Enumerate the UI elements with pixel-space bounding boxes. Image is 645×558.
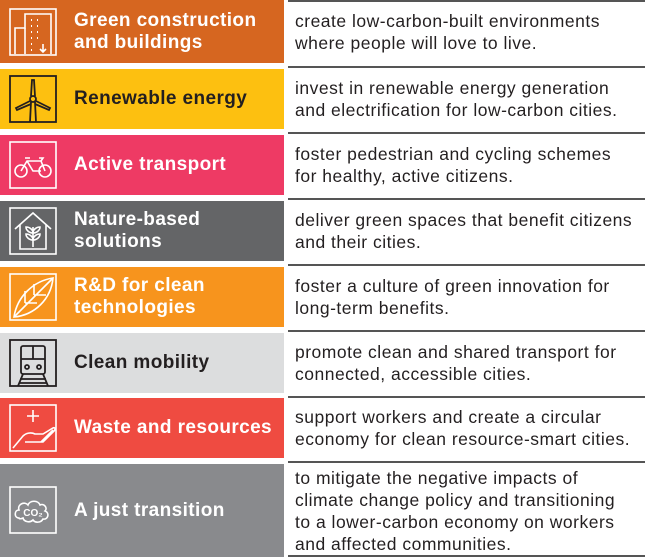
description (295, 210, 632, 252)
label (74, 10, 256, 52)
description (295, 144, 611, 186)
label: R&D for clean (74, 275, 205, 296)
icon: CO2 cloud: CO₂ (23, 508, 43, 519)
label: Nature-based (74, 209, 200, 230)
description: support workers and create a circular (295, 407, 601, 427)
description: foster a culture of green innovation for (295, 276, 610, 296)
description: long-term benefits. (295, 298, 449, 318)
label: Active transport (74, 154, 226, 175)
panel: green construction (0, 0, 284, 63)
description: foster pedestrian and cycling schemes (295, 144, 611, 164)
description: create low-carbon-built environments (295, 10, 600, 30)
icon: building (9, 8, 57, 56)
icon: CO2 cloud (9, 486, 57, 534)
label: Renewable energy (74, 88, 247, 109)
icon: bicycle (9, 141, 57, 189)
description (295, 276, 610, 318)
icon: leaf (9, 273, 57, 321)
description (295, 407, 630, 449)
row: Clean mobility (0, 333, 617, 393)
row: Green construction (0, 0, 600, 63)
panel: renewable (0, 69, 284, 129)
description: and affected communities. (295, 534, 511, 554)
row: Renewable energy (0, 69, 618, 129)
icon: hand with plus (9, 404, 57, 452)
description (295, 78, 618, 120)
description: deliver green spaces that benefit citizens (295, 210, 632, 230)
description: connected, accessible cities. (295, 364, 531, 384)
description: for healthy, active citizens. (295, 166, 513, 186)
icon: house with plant (9, 207, 57, 255)
description (295, 342, 617, 384)
description: to mitigate the negative impacts of (295, 468, 578, 488)
label: Waste and resources (74, 417, 272, 438)
row: Just transition (0, 464, 615, 557)
label: solutions (74, 231, 162, 252)
description: and their cities. (295, 232, 421, 252)
panel: nature-based (0, 201, 284, 261)
label: technologies (74, 297, 196, 318)
panel: active transport (0, 135, 284, 195)
description: to a lower-carbon economy on workers (295, 512, 615, 532)
icon: wind turbine (9, 75, 57, 123)
description: promote clean and shared transport for (295, 342, 617, 362)
row: Waste (0, 398, 630, 458)
row: Nature-based (0, 201, 632, 261)
description: and electrification for low-carbon cities. (295, 100, 618, 120)
description: where people will love to live. (295, 32, 537, 52)
row: Active transport (0, 135, 611, 195)
panel: just transition (0, 464, 284, 557)
label (74, 209, 200, 252)
label: A just transition (74, 500, 225, 520)
label (74, 275, 205, 318)
panel: waste (0, 398, 284, 458)
description: climate change policy and transitioning (295, 490, 615, 510)
label: Clean mobility (74, 352, 209, 373)
label: Green construction (74, 10, 256, 30)
row: R&D (0, 267, 610, 327)
icon: train (9, 339, 57, 387)
label: and buildings (74, 32, 203, 52)
description: economy for clean resource-smart cities. (295, 429, 630, 449)
panel: R&D (0, 267, 284, 327)
description (295, 10, 600, 52)
panel: clean mobility (0, 333, 284, 393)
description: invest in renewable energy generation (295, 78, 609, 98)
description (295, 468, 615, 554)
